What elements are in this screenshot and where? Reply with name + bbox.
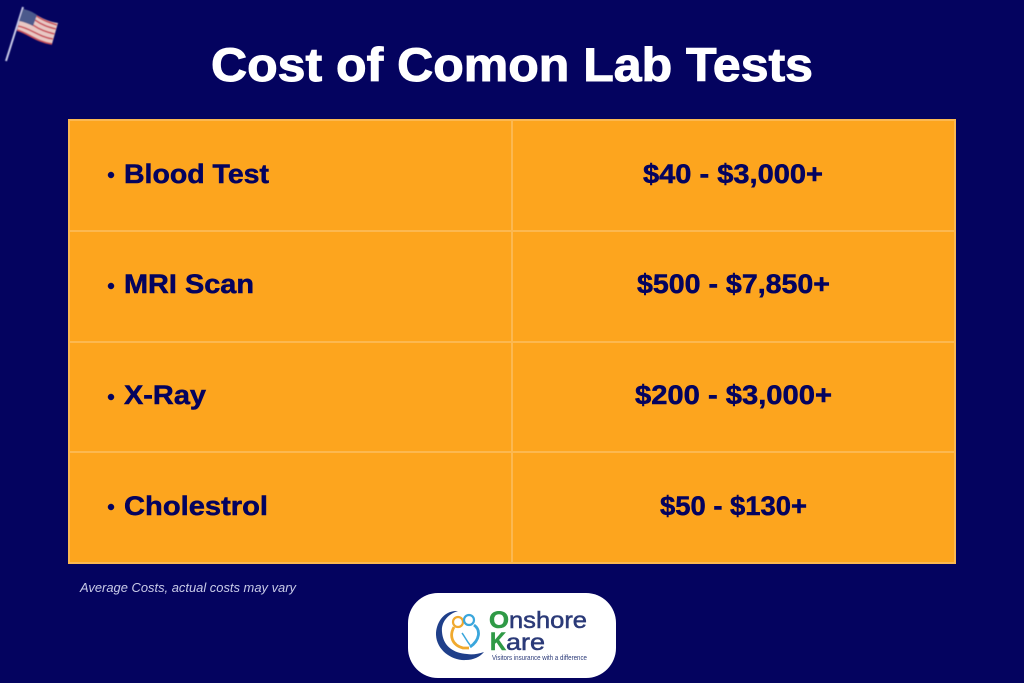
row: blood test: $40 - $3,000+ bbox=[643, 159, 823, 189]
row: blood test bbox=[108, 159, 823, 189]
row: mri scan: MRI Scan bbox=[124, 269, 254, 299]
row: cholestrol: $50 - $130+ bbox=[660, 491, 807, 521]
row: x-ray: $200 - $3,000+ bbox=[635, 380, 832, 410]
logo wordmark: O bbox=[489, 607, 509, 634]
row: blood test: Blood Test bbox=[124, 159, 269, 189]
panel: cost table bbox=[68, 119, 956, 564]
row: x-ray: X-Ray bbox=[124, 380, 206, 410]
row: mri scan: $500 - $7,850+ bbox=[637, 269, 830, 299]
logo wordmark: are bbox=[506, 629, 545, 655]
title: Cost of Comon Lab Tests bbox=[211, 38, 813, 91]
logo badge bbox=[408, 593, 616, 678]
logo wordmark: Visitors insurance with a difference bbox=[492, 655, 587, 662]
icon: american flag bbox=[6, 7, 58, 61]
logo wordmark: K bbox=[490, 628, 506, 656]
row: cholestrol: Cholestrol bbox=[124, 491, 268, 521]
row: mri scan bbox=[108, 269, 830, 299]
footnote: Average Costs, actual costs may vary bbox=[79, 581, 297, 595]
icon: logo mark bbox=[436, 611, 484, 660]
row: x-ray bbox=[108, 380, 832, 410]
row: cholestrol bbox=[108, 491, 807, 521]
logo wordmark: nshore bbox=[509, 607, 587, 633]
logo wordmark bbox=[489, 607, 587, 662]
